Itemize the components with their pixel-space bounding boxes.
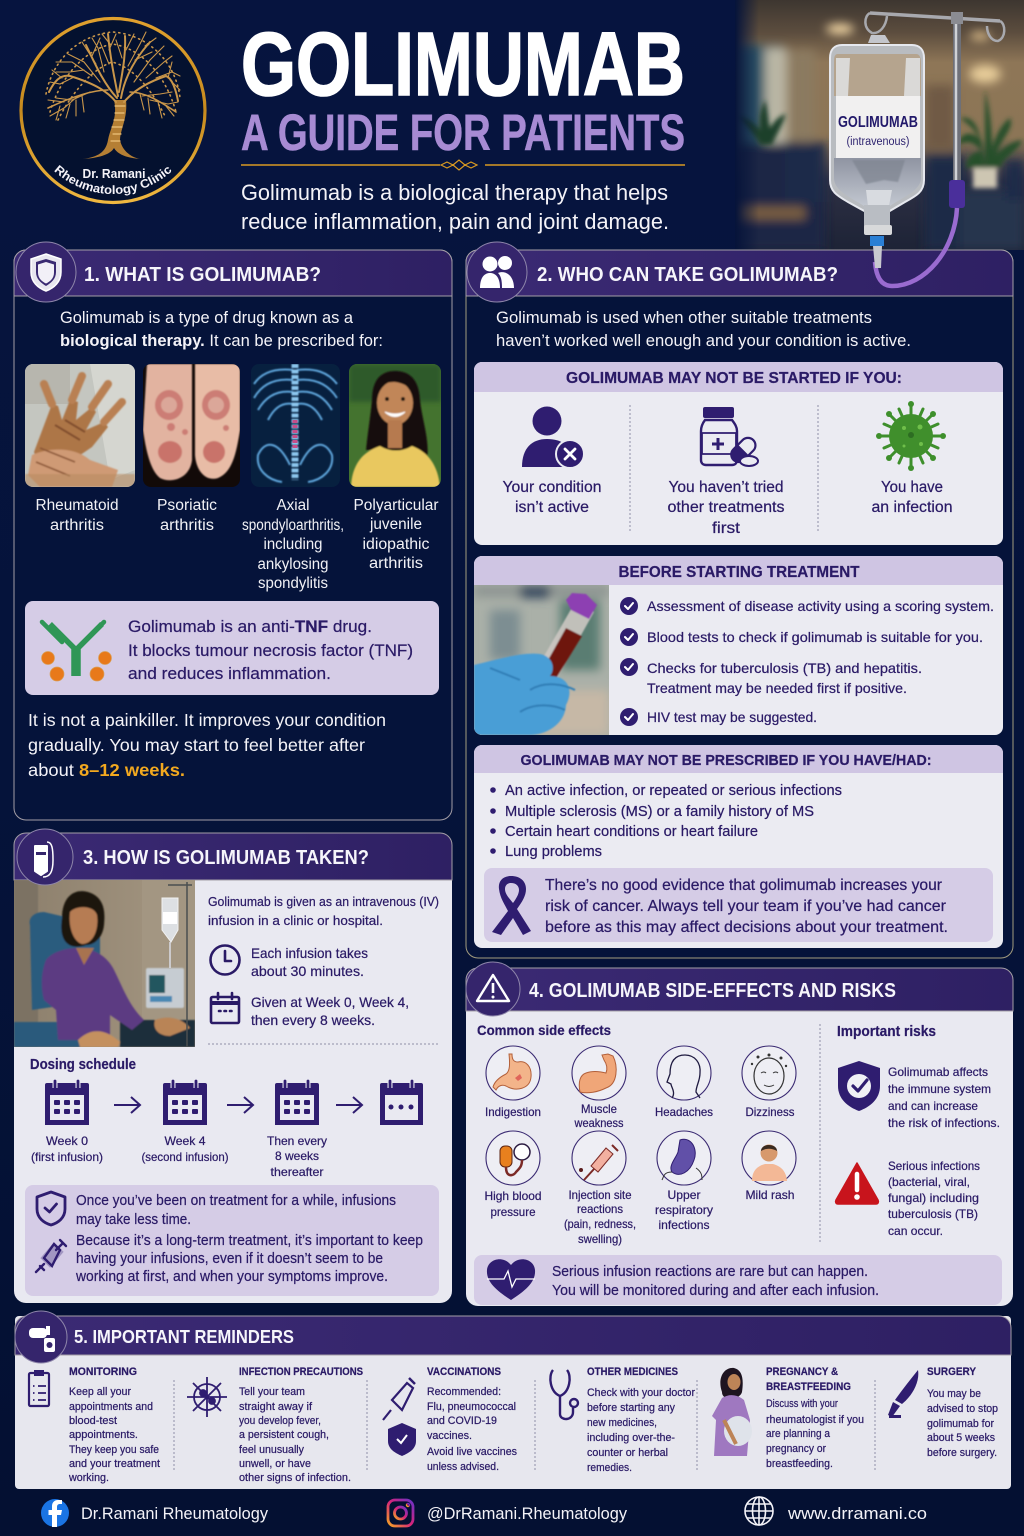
reminder: other medicines: remedies.	[587, 1462, 632, 1474]
callout: long-term treatment: having your infusions, even if it doesn’t seem to be	[76, 1251, 383, 1267]
photo: rheumatoid hands	[25, 364, 135, 487]
bag	[830, 35, 924, 268]
condition captions: idiopathic	[362, 536, 430, 553]
icon: golden tree	[46, 32, 180, 159]
icon: heart with pulse	[487, 1259, 535, 1300]
icon: pregnant woman	[712, 1368, 752, 1456]
photo: woman in infusion chair	[14, 880, 195, 1047]
reminder: other medicines	[550, 1366, 695, 1474]
condition captions: ankylosing	[258, 556, 328, 573]
icon: calendar small	[211, 993, 239, 1023]
condition captions: Rheumatoid	[36, 497, 118, 514]
condition captions: spondylitis	[258, 575, 328, 592]
reminder: monitoring: blood-test	[69, 1415, 117, 1427]
condition captions: Axial	[276, 497, 310, 514]
condition captions: arthritis	[50, 517, 104, 534]
reminder: infection precautions: unwell, or have	[239, 1458, 311, 1470]
important risks: Serious infections	[888, 1159, 980, 1173]
box: may not be prescribed: GOLIMUMAB MAY NOT BE PRESCRIBED IF YOU HAVE/HAD:	[520, 753, 932, 769]
important risks: and can increase	[888, 1099, 978, 1113]
panel 5 header	[15, 1316, 1011, 1355]
reminder: surgery: advised to stop	[927, 1403, 998, 1415]
intro text	[496, 309, 911, 350]
icon: shield badge	[16, 242, 76, 302]
box: may not be prescribed: Multiple sclerosis (MS) or a family history of MS	[505, 804, 814, 820]
not a painkiller text: gradually. You may start to feel better after	[28, 735, 365, 755]
reminder: pregnancy and breastfeeding: Discuss with your	[766, 1398, 838, 1410]
common side effects: Muscle	[581, 1102, 617, 1116]
icon: person with cross	[522, 406, 584, 468]
reminder: other medicines: including over-the-	[587, 1432, 675, 1444]
checklist: Blood tests to check if golimumab is suitable for you.	[647, 629, 983, 645]
panel 3: how is golimumab taken: then every 8 weeks.	[251, 1012, 375, 1028]
dosing schedule: Week 0	[46, 1134, 88, 1148]
important risks: Golimumab affects	[888, 1065, 988, 1079]
panel 4: side effects and risks	[466, 962, 1013, 1306]
header photo: infusion clinic room	[735, 0, 1024, 250]
icon: reminders badge	[15, 1311, 67, 1363]
reminder: monitoring	[29, 1366, 160, 1484]
callout: infusion reactions	[474, 1255, 1002, 1305]
panel 3 header	[14, 833, 452, 880]
dosing schedule	[30, 1057, 423, 1179]
reminder: vaccinations: Recommended:	[427, 1386, 501, 1398]
icon: shield check	[37, 1192, 65, 1225]
box: may not be started: other treatments	[668, 499, 785, 516]
reminder: monitoring: and your treatment	[69, 1458, 160, 1470]
icon: green virus	[876, 401, 946, 471]
box: before starting treatment	[474, 556, 1003, 735]
important risks: can occur.	[888, 1224, 943, 1238]
reminder: monitoring: working.	[68, 1472, 109, 1484]
panel 3: how is golimumab taken: Given at Week 0, Week 4,	[251, 994, 409, 1010]
icon: stethoscope	[550, 1370, 578, 1419]
important risks: tuberculosis (TB)	[888, 1207, 978, 1221]
callout: cancer evidence: before as this may affect decisions about your treatment.	[545, 919, 948, 936]
checklist: Treatment may be needed first if positive.	[647, 680, 907, 696]
reminder: vaccinations: VACCINATIONS	[427, 1366, 501, 1378]
callout: long-term treatment: working at first, and when your symptoms improve.	[75, 1269, 388, 1285]
illustration: IV bag and pole	[830, 12, 1004, 286]
panel 5: important reminders	[15, 1311, 1011, 1489]
icon: blood pressure cuff	[486, 1131, 540, 1185]
callout: infusion reactions: You will be monitored during and after each infusion.	[552, 1283, 879, 1299]
panel 5: important reminders: 5. IMPORTANT REMINDERS	[74, 1326, 294, 1347]
icon: immune shield	[838, 1061, 880, 1111]
not a painkiller text: It is not a painkiller. It improves your condition	[28, 710, 386, 730]
icon: clipboard	[29, 1370, 49, 1406]
box: may not be started: GOLIMUMAB MAY NOT BE STARTED IF YOU:	[566, 370, 902, 387]
icon: stomach	[486, 1046, 540, 1100]
reminder: pregnancy and breastfeeding	[712, 1366, 864, 1470]
condition captions: arthritis	[160, 517, 214, 534]
icon: scalpel	[888, 1370, 918, 1418]
reminder: infection precautions: INFECTION PRECAUTIONS	[239, 1366, 363, 1378]
logo: Dr. Ramani Rheumatology Clinic: Rheumatology Clinic	[54, 165, 172, 196]
panel 4 header	[466, 968, 1013, 1011]
IV in the photo	[162, 898, 178, 942]
box: may not be started: Your condition	[502, 479, 602, 496]
intro text: Golimumab is used when other suitable treatments	[496, 309, 872, 327]
checklist: Checks for tuberculosis (TB) and hepatitis.	[647, 660, 922, 676]
callout: infusion reactions: Serious infusion reactions are rare but can happen.	[552, 1264, 868, 1280]
box: may not be started: You have	[881, 479, 943, 496]
reminder: other medicines: Check with your doctor	[587, 1387, 695, 1399]
icon: people badge	[467, 242, 527, 302]
checklist: HIV test may be suggested.	[647, 709, 817, 725]
intro text: Golimumab is a type of drug known as a	[60, 309, 354, 327]
reminder: surgery: golimumab for	[927, 1418, 994, 1430]
infusion description: Golimumab is given as an intravenous (IV)	[208, 894, 439, 909]
common side effects: respiratory	[655, 1203, 713, 1217]
condition captions: Polyarticular	[354, 497, 438, 514]
icon: red warning triangle	[836, 1163, 878, 1204]
reminder: other medicines: before starting any	[587, 1402, 676, 1414]
box: may not be prescribed: Certain heart conditions or heart failure	[505, 824, 758, 840]
reminder: infection precautions: other signs of infection.	[239, 1472, 351, 1484]
intro text: haven’t worked well enough and your condition is active.	[496, 332, 911, 350]
reminder: infection precautions: feel unusually	[239, 1444, 305, 1456]
box: may not be started: You haven’t tried	[668, 479, 784, 496]
icon: dizzy face	[742, 1046, 796, 1100]
icon: upper respiratory	[657, 1131, 711, 1185]
reminder: monitoring: MONITORING	[69, 1366, 137, 1378]
icon: purple ribbon	[492, 876, 531, 935]
hair, face, body	[61, 891, 104, 947]
subtitle: reduce inflammation, pain and joint damage.	[241, 209, 669, 234]
reminder: vaccinations: vaccines.	[427, 1430, 472, 1442]
icon: head outline	[657, 1046, 711, 1100]
reminder: infection precautions: a persistent cough,	[239, 1429, 329, 1441]
photo: blood tube in gloved hand	[474, 585, 609, 735]
callout: anti-TNF: Golimumab is an anti-TNF drug.	[128, 617, 372, 636]
icon: IV badge	[17, 829, 73, 885]
box: may not be started: an infection	[872, 499, 952, 516]
common side effects: (pain, redness,	[564, 1217, 636, 1231]
reminder: infection precautions	[187, 1366, 363, 1484]
box: may not be started: first	[712, 520, 741, 537]
callout: cancer evidence: risk of cancer. Always tell your team if you’ve had cancer	[545, 898, 946, 915]
box: may not be started	[474, 362, 1003, 545]
condition captions: including	[264, 536, 322, 553]
common side effects: weakness	[574, 1116, 624, 1130]
panel 1 header	[14, 250, 452, 296]
icon: instagram	[388, 1500, 413, 1526]
footer: contacts: @DrRamani.Rheumatology	[427, 1504, 627, 1523]
callout: anti-TNF: and reduces inflammation.	[128, 664, 331, 683]
not a painkiller text	[28, 710, 386, 780]
icon: medicine bottle and pills	[701, 407, 759, 466]
condition captions: arthritis	[369, 555, 423, 572]
callout: anti-TNF	[25, 601, 439, 695]
reminder: vaccinations: Avoid live vaccines	[427, 1446, 517, 1458]
title: A GUIDE FOR PATIENTS	[241, 104, 685, 161]
dosing schedule: thereafter	[270, 1165, 324, 1179]
reminder: monitoring: They keep you safe	[69, 1444, 159, 1456]
reminder: surgery	[888, 1366, 998, 1459]
reminder: vaccinations: and COVID-19	[427, 1415, 497, 1427]
logo: Dr. Ramani Rheumatology Clinic: Dr. Ramani	[82, 166, 146, 181]
panel 1: what is golimumab: 1. WHAT IS GOLIMUMAB?	[84, 263, 321, 286]
dosing schedule: Dosing schedule	[30, 1057, 136, 1073]
common side effects	[477, 1022, 796, 1246]
important risks: the risk of infections.	[888, 1116, 1000, 1130]
panel 3: how is golimumab taken	[14, 829, 452, 1303]
important risks: Important risks	[837, 1024, 936, 1040]
reminder: other medicines: counter or herbal	[587, 1447, 668, 1459]
icon: syringe	[36, 1240, 66, 1272]
condition captions	[36, 497, 438, 592]
reminder: monitoring: Keep all your	[69, 1386, 131, 1398]
bag label: (intravenous)	[846, 136, 910, 148]
common side effects: High blood	[484, 1189, 542, 1203]
common side effects: Headaches	[655, 1105, 713, 1119]
reminder: pregnancy and breastfeeding: are planning a	[766, 1428, 830, 1440]
box: may not be prescribed: An active infection, or repeated or serious infections	[505, 783, 842, 799]
icon: mild rash	[742, 1131, 796, 1185]
dosing schedule: Week 4	[164, 1134, 206, 1148]
callout: long-term treatment	[25, 1185, 439, 1296]
common side effects: Common side effects	[477, 1022, 611, 1038]
callout: cancer evidence: There’s no good evidence that golimumab increases your	[545, 877, 942, 894]
reminder: monitoring: appointments and	[69, 1401, 153, 1413]
common side effects: Upper	[668, 1188, 700, 1202]
panel 3: how is golimumab taken: about 30 minutes.	[251, 963, 364, 979]
common side effects: Injection site	[568, 1188, 632, 1202]
panel 4: side effects and risks: 4. GOLIMUMAB SIDE-EFFECTS AND RISKS	[529, 979, 896, 1002]
callout: anti-TNF: It blocks tumour necrosis factor (TNF)	[128, 641, 413, 660]
reminder: pregnancy and breastfeeding: pregnancy or	[766, 1443, 826, 1455]
infusion description: infusion in a clinic or hospital.	[208, 913, 383, 928]
photo: psoriatic elbows	[143, 364, 240, 487]
callout: long-term treatment: Because it’s a long-term treatment, it’s important to keep	[76, 1233, 423, 1249]
common side effects: Dizziness	[746, 1105, 794, 1119]
common side effects: Indigestion	[485, 1105, 541, 1119]
common side effects: reactions	[577, 1202, 623, 1216]
checklist	[620, 597, 994, 726]
reminder: surgery: You may be	[927, 1388, 981, 1400]
panel 3: how is golimumab taken: Each infusion takes	[251, 945, 368, 961]
bag label: GOLIMUMAB	[838, 114, 918, 131]
intro text: biological therapy. It can be prescribed for:	[60, 332, 383, 350]
title	[241, 15, 685, 161]
reminder: pregnancy and breastfeeding: breastfeeding.	[766, 1458, 833, 1470]
chair back	[30, 912, 100, 1010]
arrows	[114, 1097, 362, 1113]
common side effects: pressure	[490, 1205, 536, 1219]
callout: cancer evidence	[484, 868, 993, 942]
footer: contacts	[41, 1497, 927, 1527]
title: GOLIMUMAB	[241, 15, 685, 115]
footer: contacts: www.drramani.co	[787, 1504, 927, 1523]
callout: long-term treatment: Once you’ve been on treatment for a while, infusions	[76, 1193, 396, 1209]
reminder: pregnancy and breastfeeding: rheumatologist if you	[766, 1414, 864, 1426]
icon: globe	[745, 1497, 773, 1525]
icon: muscle arm	[572, 1046, 626, 1100]
icon: syringe and shield	[383, 1378, 416, 1456]
icon: warning badge	[466, 962, 520, 1016]
reminder: other medicines: new medicines,	[587, 1417, 657, 1429]
box: before starting treatment: BEFORE STARTING TREATMENT	[618, 564, 860, 581]
box: may not be prescribed: Lung problems	[505, 844, 602, 860]
icon: antibody	[42, 622, 112, 681]
common side effects: swelling)	[578, 1232, 622, 1246]
reminder: pregnancy and breastfeeding: BREASTFEEDING	[766, 1381, 851, 1393]
common side effects: infections	[658, 1218, 710, 1232]
calendars	[45, 1080, 423, 1125]
subtitle	[241, 180, 669, 234]
tube	[875, 208, 957, 286]
reminder: infection precautions: straight away if	[239, 1401, 312, 1413]
condition captions: spondyloarthritis,	[242, 517, 344, 534]
icon: clock	[210, 946, 240, 974]
photo: spine x-ray	[251, 364, 340, 487]
reminder: vaccinations: unless advised.	[427, 1461, 499, 1473]
not a painkiller text: about 8–12 weeks.	[28, 760, 185, 780]
box: may not be prescribed	[474, 745, 1003, 948]
panel 1: what is golimumab	[14, 242, 452, 820]
dosing schedule: Then every	[267, 1134, 327, 1148]
icon: virus outline	[187, 1377, 227, 1417]
reminder: surgery: before surgery.	[927, 1447, 997, 1459]
dosing schedule: (first infusion)	[31, 1150, 103, 1164]
intro text	[60, 309, 383, 350]
pole	[865, 12, 1004, 208]
panel 3: how is golimumab taken: 3. HOW IS GOLIMUMAB TAKEN?	[83, 846, 369, 869]
logo: Dr. Ramani Rheumatology Clinic	[19, 16, 207, 204]
common side effects: Mild rash	[746, 1188, 794, 1202]
gold ornament divider	[241, 160, 685, 170]
icon: facebook	[41, 1499, 69, 1527]
footer: contacts: Dr.Ramani Rheumatology	[81, 1504, 268, 1523]
important risks: the immune system	[888, 1082, 991, 1096]
important risks: fungal) including	[888, 1191, 979, 1205]
important risks	[836, 1024, 1000, 1238]
box: may not be started: isn’t active	[515, 499, 589, 516]
panel 2: who can take golimumab: 2. WHO CAN TAKE GOLIMUMAB?	[537, 263, 838, 286]
reminder: surgery: about 5 weeks	[927, 1432, 995, 1444]
reminder: pregnancy and breastfeeding: PREGNANCY &	[766, 1366, 838, 1378]
dosing schedule: (second infusion)	[142, 1150, 228, 1164]
reminder: monitoring: appointments.	[69, 1429, 138, 1441]
panel 2 header	[466, 250, 1013, 296]
icon: injection syringe	[572, 1131, 626, 1185]
callout: long-term treatment: may take less time.	[76, 1212, 191, 1228]
pump	[146, 968, 184, 1008]
reminder: infection precautions: you develop fever,	[239, 1415, 321, 1427]
important risks: (bacterial, viral,	[888, 1175, 970, 1189]
infusion description	[208, 894, 439, 928]
reminder: surgery: SURGERY	[927, 1366, 976, 1378]
checklist: Assessment of disease activity using a scoring system.	[647, 598, 994, 614]
condition captions: Psoriatic	[157, 497, 217, 514]
subtitle: Golimumab is a biological therapy that helps	[241, 180, 668, 205]
reminder: vaccinations: Flu, pneumococcal	[427, 1401, 516, 1413]
condition captions: juvenile	[369, 516, 422, 533]
reminder: vaccinations	[383, 1366, 517, 1473]
reminder: infection precautions: Tell your team	[239, 1386, 305, 1398]
dosing schedule: 8 weeks	[275, 1149, 319, 1163]
reminder: other medicines: OTHER MEDICINES	[587, 1366, 678, 1378]
bag label	[836, 96, 920, 158]
photo: smiling girl	[349, 364, 441, 487]
